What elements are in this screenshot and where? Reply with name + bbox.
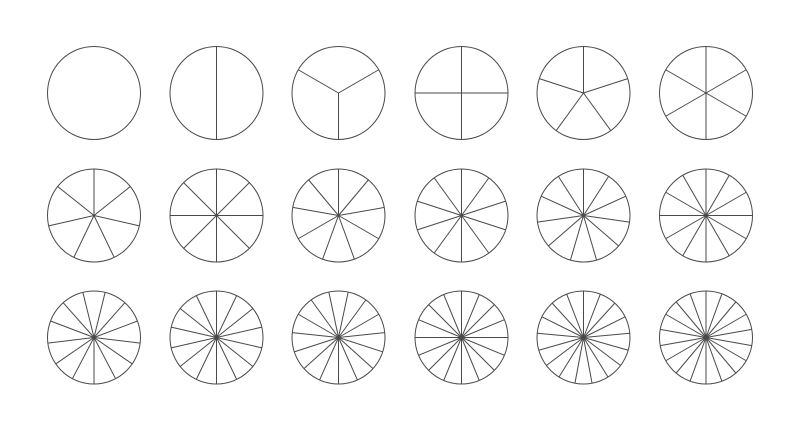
pie: 17 segments: [537, 291, 630, 384]
pie: 13 segments: [48, 291, 140, 384]
pie: 12 segments: [660, 169, 752, 262]
pie: 11 segments: [537, 169, 630, 262]
pie: 9 segments: [292, 169, 385, 262]
pie: 2 segments: [170, 46, 263, 140]
pie: 16 segments: [415, 291, 508, 384]
pie: 4 segments: [415, 46, 508, 140]
pie: 15 segments: [292, 291, 385, 384]
pie: 6 segments: [660, 46, 752, 140]
pie: 7 segments: [48, 169, 140, 262]
pie: whole circle: [48, 46, 140, 140]
pie: 8 segments: [170, 169, 263, 262]
pie: 18 segments: [660, 291, 752, 384]
pie: 3 segments: [292, 46, 385, 140]
pie: 10 segments: [415, 169, 508, 262]
pie: 5 segments: [537, 46, 630, 140]
pie: 14 segments: [170, 291, 263, 384]
